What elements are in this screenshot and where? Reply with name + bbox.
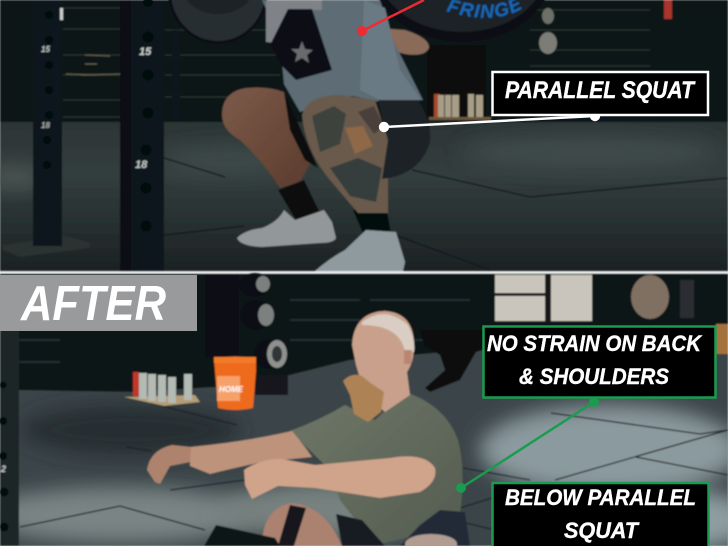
- orange bucket: HOME: [219, 385, 244, 394]
- athlete: shirt: [290, 392, 463, 545]
- athlete: head and beard: [343, 311, 414, 422]
- athlete: knee and shorts: [262, 503, 470, 546]
- athlete: raised arms: [147, 431, 435, 499]
- rack post: [0, 331, 19, 546]
- rack post right: 18: [135, 159, 148, 171]
- callout: below parallel squat: BELOW PARALLEL: [505, 485, 696, 510]
- panel: after photo, below parallel squat: [0, 273, 728, 546]
- wall slats: [12, 300, 470, 362]
- athlete: wrist wraps and flag towel: [266, 0, 322, 44]
- callout: no strain on back and shoulders: [484, 326, 716, 398]
- weight plate left: [168, 0, 268, 44]
- rack post: 2: [0, 464, 6, 474]
- weight plates on wall: [205, 273, 288, 395]
- panel: before photo, parallel squat: [0, 0, 728, 272]
- athlete: shorts: [378, 100, 430, 179]
- background bottles and small plates: [427, 0, 672, 120]
- athlete: socks and shoes: [278, 180, 320, 220]
- rack post right: 15: [139, 46, 152, 58]
- pointer: green dot and line: [456, 397, 599, 493]
- rack post left: 15: [41, 45, 50, 54]
- pointer: white dot and line: [379, 111, 600, 132]
- pointer: red dot and line: [357, 0, 424, 36]
- callout: below parallel squat: [492, 483, 708, 546]
- rack post left: [3, 0, 90, 257]
- background bench and white panel: [420, 275, 728, 392]
- callout: no strain on back and shoulders: NO STRAIN ON BACK: [487, 331, 703, 356]
- wall slats: [63, 8, 650, 117]
- athlete: bare right leg: [222, 88, 312, 188]
- callout: no strain on back and shoulders: & SHOULDERS: [519, 364, 669, 389]
- callout: below parallel squat: SQUAT: [564, 518, 640, 543]
- athlete: arm: [378, 28, 429, 55]
- heading: after: AFTER: [20, 277, 167, 331]
- athlete: shirt: [262, 0, 423, 112]
- bottles on wooden board: [124, 372, 200, 406]
- callout: parallel squat: PARALLEL SQUAT: [505, 77, 696, 104]
- gym floor: [0, 330, 728, 546]
- loaded barbell plate: [378, 0, 546, 42]
- box and strap: [204, 505, 306, 546]
- orange bucket: [214, 356, 256, 410]
- rack post left: 18: [41, 121, 50, 130]
- rack post right: [120, 0, 164, 271]
- callout: parallel squat: [492, 72, 708, 115]
- athlete: tattooed leg: [302, 95, 388, 213]
- gym floor: [0, 122, 728, 271]
